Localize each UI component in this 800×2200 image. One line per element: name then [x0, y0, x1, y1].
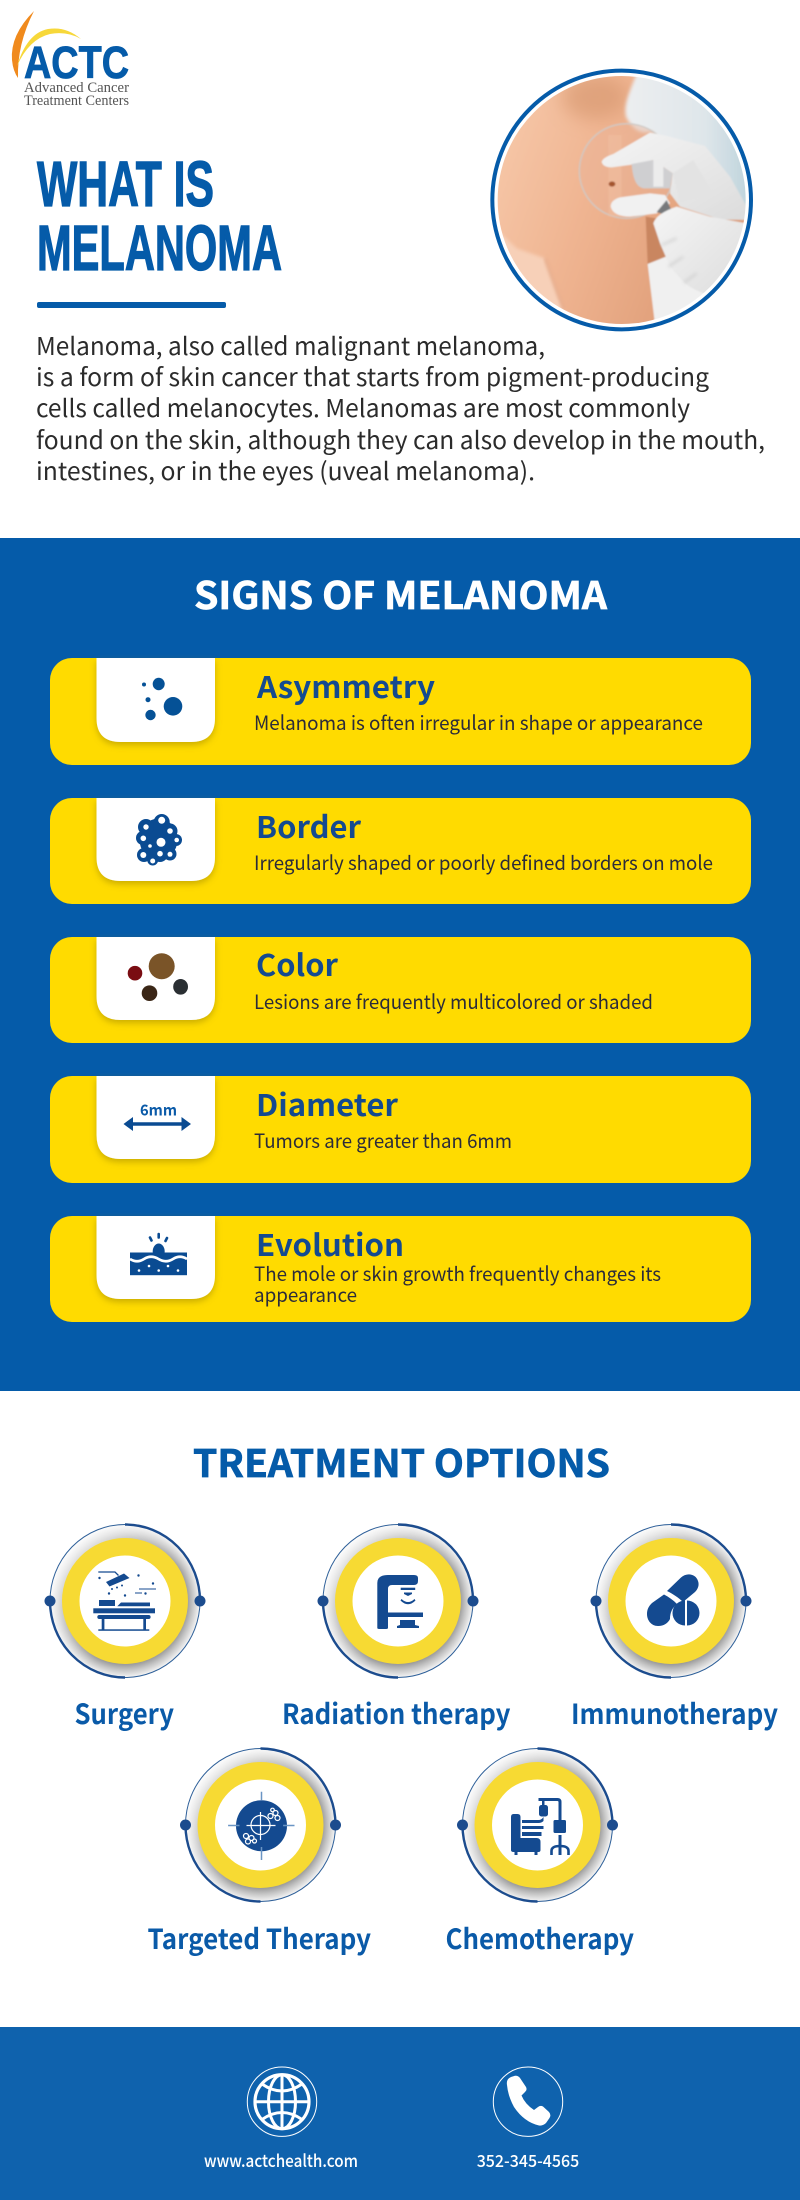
- heading: treatment options: TREATMENT OPTIONS: [193, 1433, 610, 1488]
- treatment: targeted therapy: [180, 1748, 341, 1902]
- body text: is a form of skin cancer that starts from pigment-producing: [36, 359, 709, 394]
- card: evolution: appearance: [254, 1279, 357, 1308]
- icon: coloured spots: [128, 953, 188, 1001]
- card: color: Lesions are frequently multicolored or shaded: [254, 986, 653, 1015]
- icon: target on cell: [228, 1792, 294, 1860]
- icon: scattered dots: [142, 678, 182, 720]
- icon: phone: [493, 2067, 563, 2136]
- title: [37, 148, 282, 284]
- card: border: Border: [256, 803, 362, 847]
- heading: signs: SIGNS OF MELANOMA: [194, 565, 608, 620]
- body text: [36, 328, 765, 488]
- card: border: Irregularly shaped or poorly defined borders on mole: [254, 847, 713, 876]
- body text: Melanoma, also called malignant melanoma,: [36, 328, 545, 363]
- body text: intestines, or in the eyes (uveal melanoma).: [36, 453, 535, 488]
- treatment: radiation therapy: [318, 1524, 478, 1678]
- label: chemotherapy: Chemotherapy: [446, 1918, 634, 1958]
- icon: pills: [647, 1574, 700, 1626]
- logo: ACTC: ACTC: [24, 37, 129, 88]
- label: immunotherapy: Immunotherapy: [571, 1693, 778, 1733]
- text: phone number: 352-345-4565: [477, 2147, 579, 2172]
- card: diameter: Diameter: [256, 1081, 399, 1125]
- card: border: [50, 798, 751, 904]
- label: targeted therapy: Targeted Therapy: [148, 1918, 371, 1958]
- card: evolution: [50, 1216, 751, 1322]
- text: website: www.actchealth.com: [204, 2147, 358, 2172]
- panel: signs of melanoma: [0, 538, 800, 1391]
- icon: evolving skin growth: [130, 1234, 187, 1275]
- card: diameter: [50, 1076, 751, 1183]
- card: color: [50, 937, 751, 1043]
- logo: ACTC: Advanced Cancer: [24, 80, 129, 96]
- card: diameter: Tumors are greater than 6mm: [254, 1125, 512, 1154]
- icon: 6mm arrow: 6mm: [140, 1098, 177, 1120]
- title underline: [37, 302, 226, 308]
- treatment: chemotherapy: [457, 1748, 618, 1902]
- card: asymmetry: Asymmetry: [256, 663, 435, 707]
- icon: irregular blob: [136, 814, 182, 866]
- title: WHAT IS: [37, 148, 214, 220]
- icon: operating table and lamp: [93, 1572, 156, 1631]
- footer panel: [0, 2027, 800, 2200]
- icon: infusion chair: [511, 1798, 568, 1855]
- body text: cells called melanocytes. Melanomas are most commonly: [36, 390, 690, 425]
- treatment: surgery: [44, 1524, 206, 1678]
- logo: ACTC: Treatment Centers: [24, 93, 129, 109]
- card: asymmetry: [50, 658, 751, 765]
- label: surgery: Surgery: [74, 1693, 174, 1733]
- card: asymmetry: Melanoma is often irregular in shape or appearance: [254, 707, 703, 736]
- icon: 6mm arrow: [124, 1098, 191, 1131]
- photo: doctor examining a mole with a magnifier: [492, 70, 757, 333]
- icon: globe: [247, 2067, 317, 2136]
- card: color: Color: [256, 941, 339, 985]
- logo: ACTC: [12, 11, 129, 109]
- card: evolution: The mole or skin growth frequently changes its: [254, 1258, 661, 1287]
- treatment: immunotherapy: [590, 1524, 752, 1678]
- body text: found on the skin, although they can also develop in the mouth,: [36, 422, 765, 457]
- card: evolution: Evolution: [256, 1221, 404, 1265]
- icon: radiation machine: [377, 1575, 423, 1629]
- label: radiation therapy: Radiation therapy: [282, 1693, 510, 1733]
- title: MELANOMA: [37, 212, 282, 284]
